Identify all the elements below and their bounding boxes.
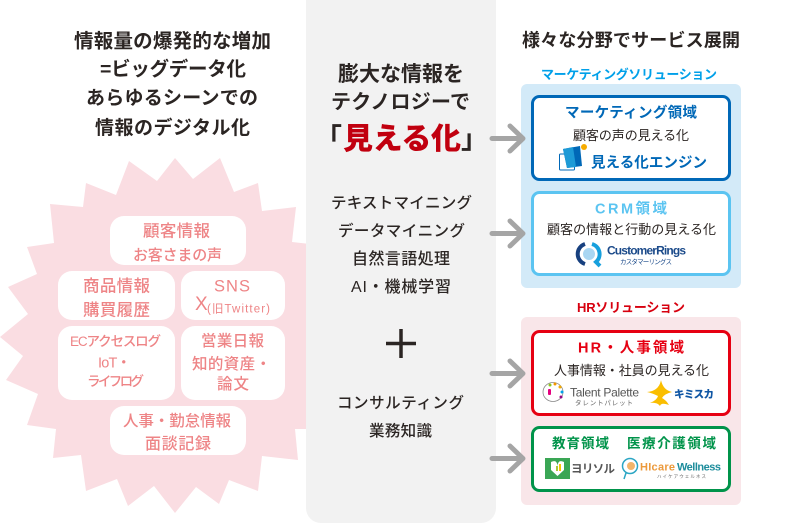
CRM card: カスタマーリングス xyxy=(620,257,672,266)
HR card xyxy=(532,332,730,414)
HR solution panel xyxy=(521,317,741,505)
education and healthcare card: HIcare xyxy=(640,462,675,474)
left heading: 情報量の爆発的な増加 xyxy=(74,30,271,52)
data box: SNS xyxy=(181,271,285,320)
data box: EC access logs: IoT・ xyxy=(98,356,131,372)
data box: HR info: 人事・勤怠情報 xyxy=(123,412,231,430)
technology list: テキストマイニング xyxy=(331,194,472,212)
icon: visualization engine xyxy=(560,144,587,170)
data box: sales reports: 営業日報 xyxy=(201,332,264,350)
education and healthcare card: ヨリソル xyxy=(571,464,616,476)
education and healthcare card: 医療介護領域 xyxy=(627,435,716,451)
marketing card: 顧客の声の見える化 xyxy=(573,128,689,143)
center heading: 」 xyxy=(461,124,488,154)
right heading: 様々な分野でサービス展開 xyxy=(522,30,740,50)
HR card: HR・人事領域 xyxy=(578,338,684,356)
HR card: 人事情報・社員の見える化 xyxy=(554,363,709,378)
marketing solution panel xyxy=(521,84,741,288)
plus sign xyxy=(386,329,416,358)
arrow: to CRM xyxy=(492,221,523,246)
left heading: あらゆるシーンでの xyxy=(86,87,258,109)
data box: EC access logs: ライフログ xyxy=(87,373,144,389)
icon: Hicare Wellness xyxy=(622,458,638,479)
marketing card: マーケティング領域 xyxy=(565,104,698,122)
data box: sales reports: 論文 xyxy=(217,375,249,393)
technology list: AI・機械学習 xyxy=(351,278,451,296)
icon: Yorisol xyxy=(545,458,570,479)
marketing card xyxy=(532,96,730,180)
center heading: 膨大な情報を xyxy=(338,63,464,86)
HR solution label: HRソリューション xyxy=(577,300,685,315)
data box: EC access logs: ECアクセスログ xyxy=(70,333,162,349)
consulting list: コンサルティング xyxy=(337,394,464,412)
data box: product info xyxy=(58,271,175,320)
education and healthcare card: ハイケアウェルネス xyxy=(657,473,706,480)
data box: SNS: SNS xyxy=(214,278,250,296)
CRM card: CustomerRings xyxy=(607,244,686,258)
consulting list xyxy=(337,394,464,440)
HR card: Talent Palette xyxy=(570,386,639,400)
center heading: テクノロジーで xyxy=(331,90,470,114)
education and healthcare card xyxy=(532,428,730,490)
data box: customer info xyxy=(110,216,246,265)
center heading: 見える化 xyxy=(343,123,461,156)
CRM card xyxy=(532,192,730,274)
education and healthcare card: Wellness xyxy=(677,462,721,474)
arrow: to education and healthcare xyxy=(492,446,523,471)
HR card: キミスカ xyxy=(674,388,714,400)
data box: sales reports xyxy=(181,326,285,400)
arrow: to marketing xyxy=(492,126,523,151)
icon: Kimisuka star xyxy=(647,380,672,406)
marketing solution label: マーケティングソリューション xyxy=(541,67,717,82)
starburst: data types xyxy=(0,158,310,513)
HR card: タレントパレット xyxy=(575,398,633,407)
left heading: 情報のデジタル化 xyxy=(95,116,250,139)
data box: product info: 購買履歴 xyxy=(83,300,150,320)
data box: HR info xyxy=(110,406,246,455)
center panel xyxy=(306,0,496,523)
data box: customer info: 顧客情報 xyxy=(143,222,210,240)
left heading xyxy=(74,30,271,139)
center heading xyxy=(315,63,488,156)
data box: HR info: 面談記録 xyxy=(145,435,211,453)
data box: sales reports: 知的資産・ xyxy=(192,355,271,373)
data box: product info: 商品情報 xyxy=(83,276,150,296)
data box: EC access logs xyxy=(58,326,175,400)
CRM card: CRM領域 xyxy=(595,200,668,218)
data box: customer info: お客さまの声 xyxy=(133,246,222,264)
arrow: to HR xyxy=(492,361,523,386)
technology list: データマイニング xyxy=(338,221,465,240)
consulting list: 業務知識 xyxy=(369,422,432,440)
technology list xyxy=(331,194,472,296)
center heading: 「 xyxy=(315,124,342,154)
technology list: 自然言語処理 xyxy=(352,250,450,268)
education and healthcare card: 教育領域 xyxy=(552,435,610,451)
left heading: =ビッグデータ化 xyxy=(100,58,246,80)
icon: Talent Palette xyxy=(543,382,564,402)
marketing card: 見える化エンジン xyxy=(591,154,707,172)
data box: SNS: X xyxy=(195,294,208,315)
data box: SNS: (旧Twitter) xyxy=(207,302,270,316)
CRM card: 顧客の情報と行動の見える化 xyxy=(547,222,716,237)
icon: CustomerRings xyxy=(578,244,600,266)
